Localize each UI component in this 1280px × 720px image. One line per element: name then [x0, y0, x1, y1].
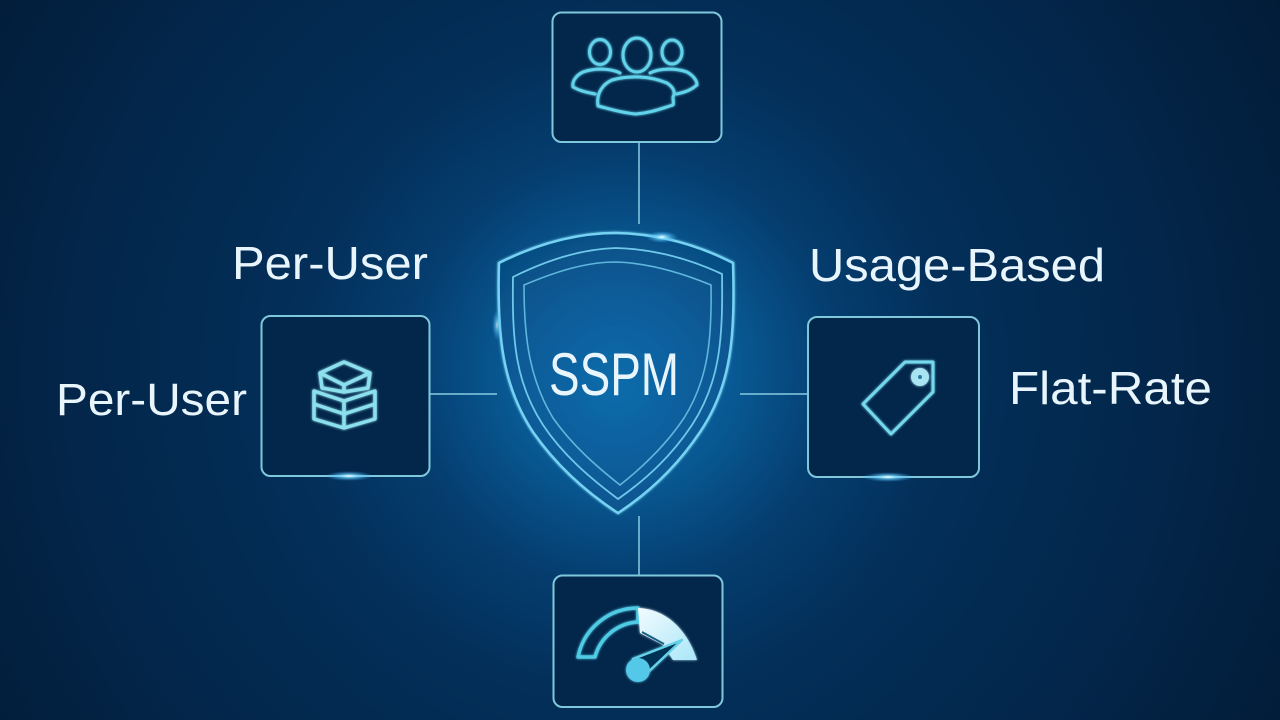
- shield inner outline: [524, 262, 711, 485]
- label: per-user top: Per-User: [232, 237, 428, 289]
- connector lines: [430, 142, 808, 575]
- shield sparkle top: [646, 231, 678, 243]
- shield middle outline: [513, 248, 722, 499]
- central shield: [492, 231, 733, 513]
- shield outer outline: [499, 233, 733, 513]
- shield sparkle left: [492, 309, 502, 341]
- icon: gauge: [578, 608, 697, 682]
- card glow: [862, 472, 914, 482]
- icon: price tag: [863, 362, 933, 434]
- icon: stacked layers: [314, 362, 375, 428]
- card: top users: [552, 12, 722, 142]
- gauge needle: [633, 640, 682, 674]
- card: left stack: [262, 316, 430, 481]
- label: flat-rate: Flat-Rate: [1009, 362, 1212, 414]
- label: usage-based: Usage-Based: [809, 239, 1105, 291]
- icon: users: [573, 38, 697, 114]
- label: per-user left: Per-User: [56, 374, 247, 425]
- card: right tag: [808, 317, 979, 482]
- card glow: [325, 471, 373, 481]
- card: bottom gauge: [554, 576, 722, 707]
- shield label: SSPM: [549, 341, 679, 408]
